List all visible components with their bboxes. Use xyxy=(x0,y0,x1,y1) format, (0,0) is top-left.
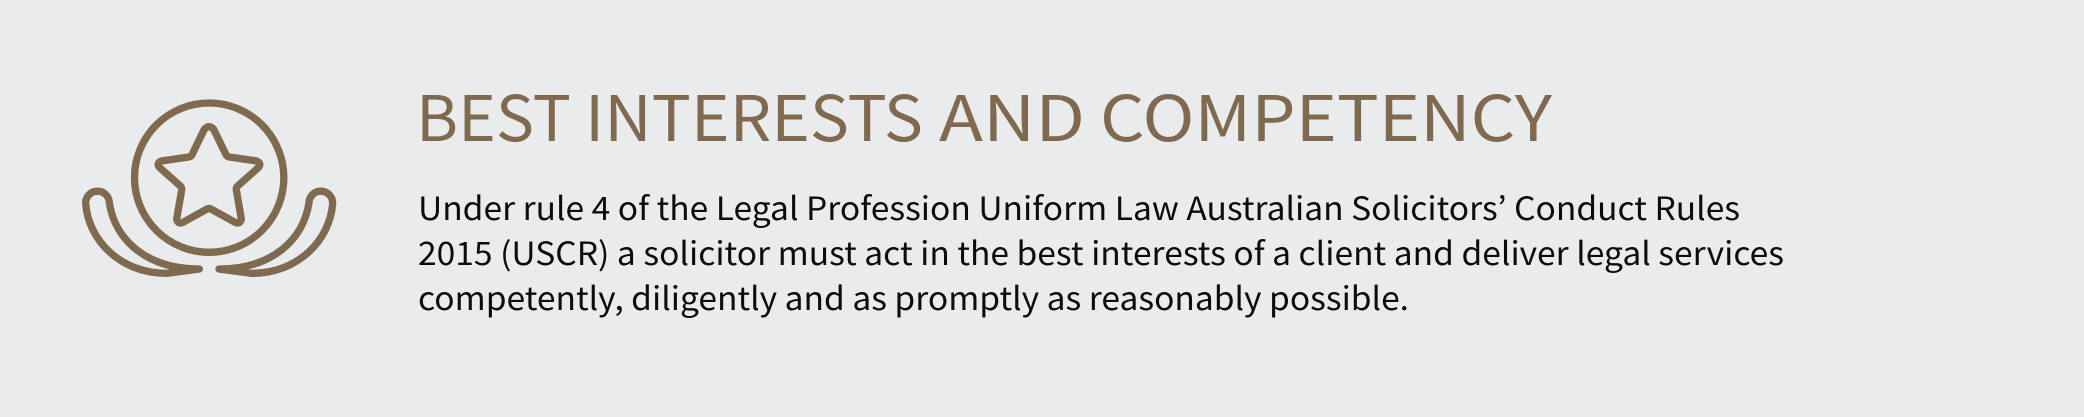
body text: Under rule 4 of the Legal Profession Uniform Law Australian Solicitors’ Conduct Rules xyxy=(418,184,1740,230)
body text xyxy=(418,184,1784,320)
heading: AND xyxy=(939,69,1085,160)
icon: star in circle held by two hands xyxy=(86,103,333,273)
icon: right hand xyxy=(219,191,333,273)
heading xyxy=(416,69,1553,160)
icon: star xyxy=(158,127,260,223)
heading: INTERESTS xyxy=(585,69,923,160)
heading: COMPETENCY xyxy=(1100,69,1553,160)
body text: 2015 (USCR) a solicitor must act in the best interests of a client and deliver legal services xyxy=(418,229,1784,275)
heading: BEST xyxy=(416,69,571,160)
body text: competently, diligently and as promptly as reasonably possible. xyxy=(418,274,1409,320)
icon: left hand xyxy=(86,191,199,273)
icon: circle xyxy=(134,103,284,252)
